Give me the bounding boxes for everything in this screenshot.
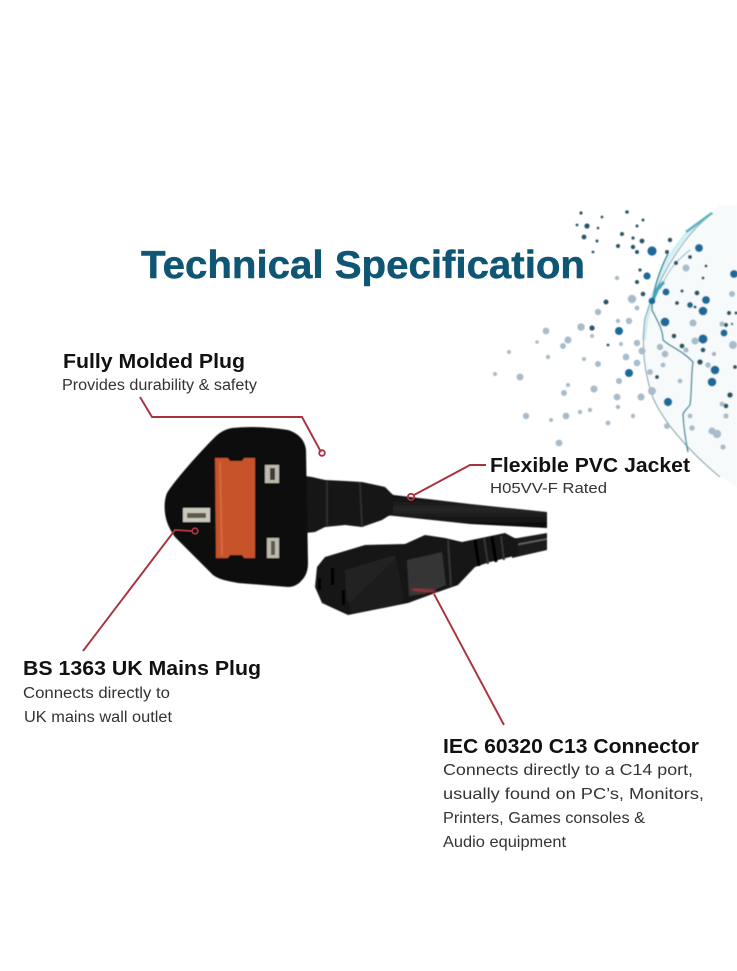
globe halo [644,222,700,340]
power cables [385,494,547,558]
cable: upper [385,494,547,528]
label: IEC 60320 C13 connector: Audio equipment [443,834,567,851]
label: BS 1363 UK mains plug [23,657,261,726]
plug body [165,427,308,587]
pin: top [265,465,279,483]
label: flexible PVC jacket [490,455,690,497]
label: BS 1363 UK mains plug: UK mains wall outlet [24,709,173,726]
label: fully molded plug: Provides durability & safety [62,377,257,394]
globe shading [643,205,737,488]
label: BS 1363 UK mains plug: Connects directly to [23,685,170,702]
label: IEC 60320 C13 connector: IEC 60320 C13 Connector [443,735,699,758]
connector face highlight [345,555,405,613]
UK plug [165,427,308,587]
callout: fully molded plug [140,397,325,456]
connector red smear [412,589,436,592]
light dots [493,264,737,450]
pin: bottom [267,538,279,558]
C13 connector [315,533,518,615]
connector sockets [318,578,321,590]
label: flexible PVC jacket: Flexible PVC Jacket [490,455,690,477]
pin: earth [183,508,210,522]
cable: lower [512,533,547,558]
title: Technical Specification [141,244,585,287]
label: fully molded plug: Fully Molded Plug [63,350,245,373]
globe outline [643,213,720,477]
blue dots [615,244,737,406]
connector ribs [475,537,496,566]
label: IEC 60320 C13 connector [443,735,704,851]
callout: UK mains plug [83,528,198,651]
continent highlight [686,213,712,232]
orange fuse cover [215,458,255,558]
label: fully molded plug [62,350,257,394]
globe graphic [493,205,737,488]
strain relief: UK plug [305,476,393,533]
label: IEC 60320 C13 connector: Connects directly to a C14 port, [443,762,693,779]
label: IEC 60320 C13 connector: Printers, Games consoles & [443,810,645,827]
label: flexible PVC jacket: H05VV-F Rated [490,480,607,497]
continent lines [652,254,693,452]
connector body [315,533,518,615]
connector collar highlight [407,552,446,596]
callout: PVC jacket [408,465,486,500]
label: IEC 60320 C13 connector: usually found on PC’s, Monitors, [443,786,704,803]
callout: C13 connector [434,594,504,725]
label: BS 1363 UK mains plug: BS 1363 UK Mains Plug [23,657,261,680]
dark dots [576,210,737,408]
